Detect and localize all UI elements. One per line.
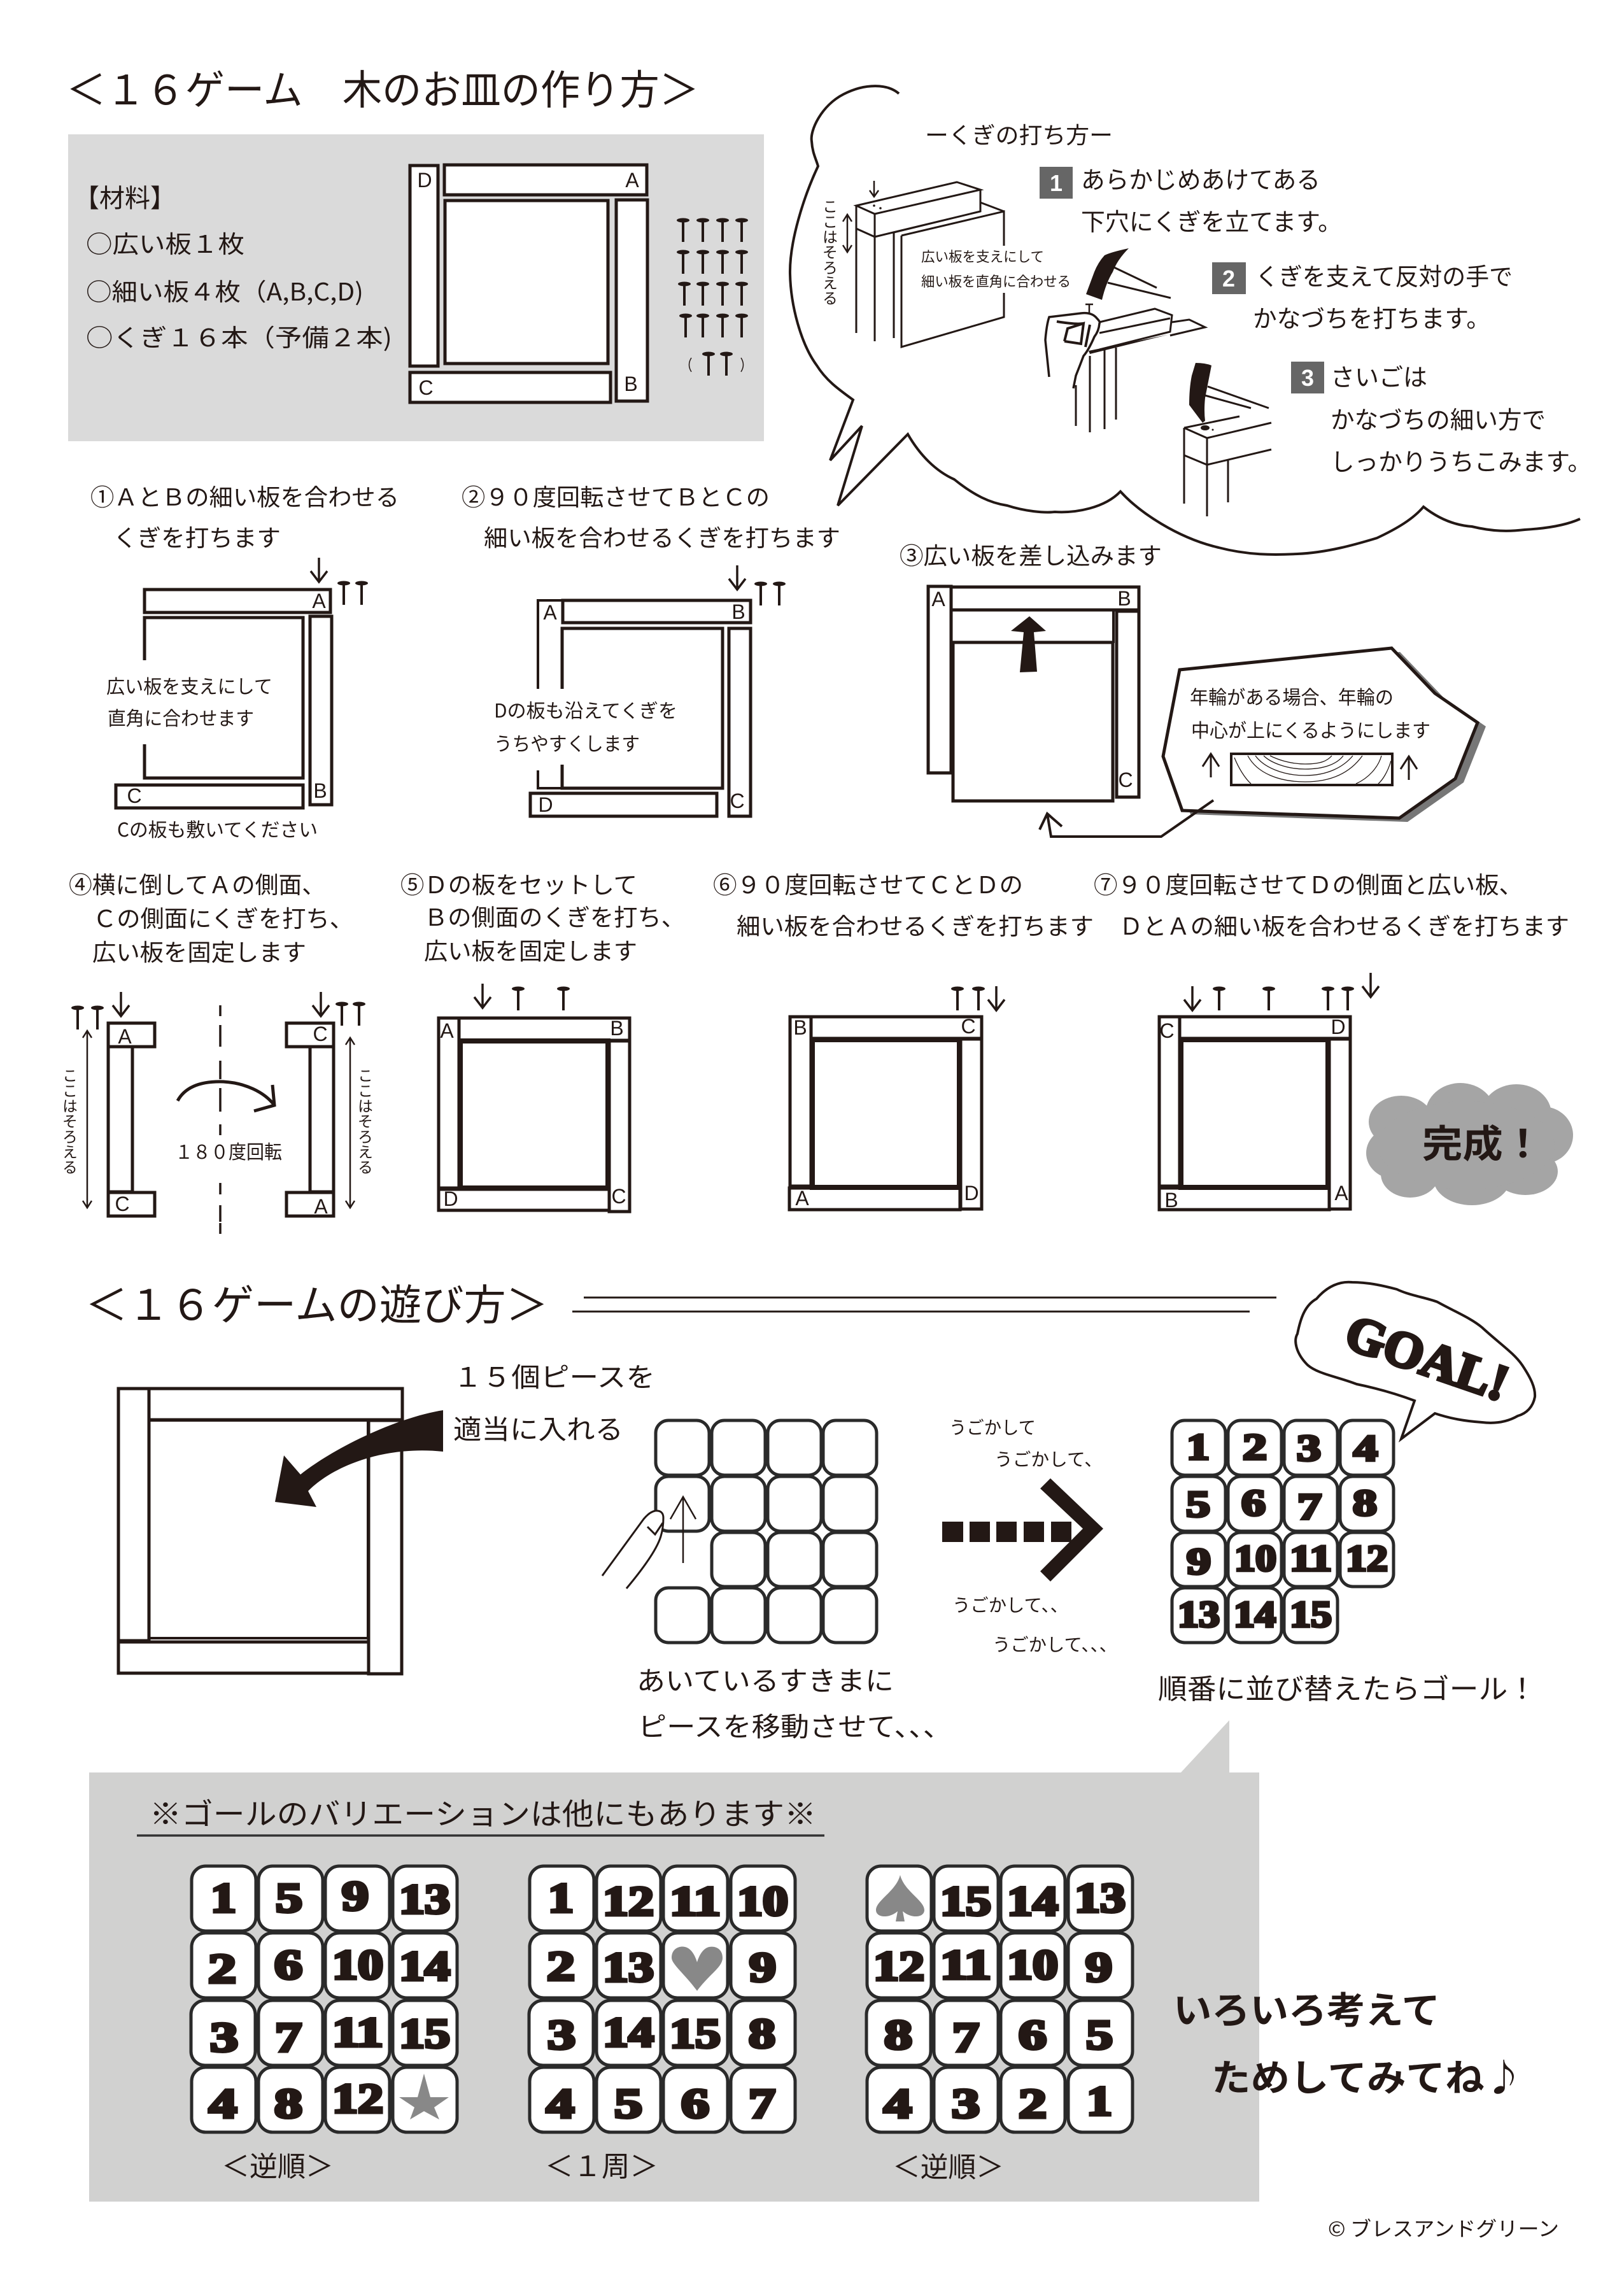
step 2: かなづちを打ちます。 bbox=[1253, 299, 1490, 334]
icon: spade bbox=[876, 1875, 924, 1921]
goal puzzle grid: 13 bbox=[1178, 1594, 1220, 1635]
completed cloud badge bbox=[1366, 1083, 1573, 1205]
panel: materials bbox=[68, 134, 764, 441]
grid: descending: 12 bbox=[873, 1943, 924, 1990]
step 1 heading: ①ＡとＢの細い板を合わせる bbox=[90, 478, 399, 513]
step 2 diagram: Dの板も沿えてくぎを bbox=[494, 695, 677, 723]
goal speech bubble: GOAL! bbox=[1338, 1305, 1516, 1412]
grid: one lap spiral: 8 bbox=[749, 2011, 775, 2057]
grid: descending: 8 bbox=[884, 2012, 912, 2058]
caption: move pieces: ピースを移動させて、、、 bbox=[638, 1706, 952, 1744]
icon: heart bbox=[672, 1947, 723, 1991]
step 5 heading: ⑤Ｄの板をセットして bbox=[400, 866, 637, 900]
grid: one lap spiral: 6 bbox=[681, 2081, 709, 2127]
grid: descending: 7 bbox=[952, 2014, 979, 2061]
grid: one lap spiral: 13 bbox=[603, 1944, 654, 1991]
materials list: 【材料】 bbox=[74, 178, 176, 215]
step 4 diagram bbox=[59, 992, 377, 1234]
grid: one lap spiral: 5 bbox=[614, 2081, 642, 2127]
step 2 heading bbox=[462, 478, 840, 553]
goal speech bubble bbox=[1296, 1282, 1535, 1439]
step 1: 1 bbox=[1050, 170, 1063, 196]
closing message: いろいろ考えて bbox=[1173, 1981, 1440, 2034]
grid: reverse order column: 13 bbox=[399, 1876, 450, 1923]
goal puzzle grid: 1 bbox=[1187, 1426, 1210, 1468]
goal puzzle grid bbox=[1172, 1420, 1394, 1643]
grid: reverse order column bbox=[191, 1866, 457, 2132]
grid: one lap spiral: 4 bbox=[546, 2081, 574, 2127]
step 5 heading: 広い板を固定します bbox=[424, 932, 637, 966]
step 7 heading bbox=[1094, 866, 1569, 942]
materials list: ○くぎ１６本（予備２本) bbox=[86, 318, 392, 353]
step 4 diagram: ここはそろえる bbox=[59, 1068, 81, 1175]
grid: descending: 4 bbox=[884, 2081, 912, 2127]
step 4 diagram: A bbox=[118, 1025, 132, 1048]
goal puzzle grid: 9 bbox=[1187, 1541, 1211, 1582]
grid: descending: 10 bbox=[1007, 1942, 1058, 1988]
step 3 diagram bbox=[928, 586, 1139, 801]
step 4 diagram: １８０度回転 bbox=[175, 1136, 282, 1164]
step 1 diagram: Cの板も敷いてください bbox=[117, 814, 318, 842]
goal puzzle grid: 11 bbox=[1290, 1538, 1332, 1579]
step 5 diagram: A bbox=[440, 1019, 454, 1042]
step 6 diagram bbox=[789, 986, 1005, 1210]
step 1 heading: くぎを打ちます bbox=[113, 519, 281, 553]
step 3 diagram: B bbox=[1117, 587, 1131, 610]
goal puzzle grid: 2 bbox=[1243, 1426, 1267, 1468]
step 1: あらかじめあけてある bbox=[1081, 160, 1320, 195]
label: one lap: ＜１周＞ bbox=[545, 2144, 658, 2184]
grid: descending: 3 bbox=[952, 2081, 980, 2127]
goal puzzle grid: 8 bbox=[1353, 1482, 1377, 1524]
grid: one lap spiral: 3 bbox=[547, 2012, 575, 2058]
grid: descending: 9 bbox=[1085, 1944, 1112, 1991]
step 4 diagram: ここはそろえる bbox=[354, 1068, 377, 1175]
dashed arrow with captions: うごかして bbox=[949, 1414, 1036, 1440]
goal puzzle grid: 5 bbox=[1186, 1483, 1210, 1525]
panel heading: ※ゴールのバリエーションは他にもあります※ bbox=[150, 1790, 816, 1834]
completed cloud badge: 完成！ bbox=[1422, 1114, 1543, 1169]
step 3: しっかりうちこみます。 bbox=[1331, 442, 1592, 478]
dashed arrow with captions: うごかして、、、 bbox=[992, 1631, 1117, 1657]
step 5 diagram: D bbox=[443, 1187, 458, 1210]
step 2 bbox=[1212, 257, 1513, 334]
grid: reverse order column: 2 bbox=[208, 1946, 236, 1992]
grid: one lap spiral: 15 bbox=[670, 2011, 721, 2057]
callout: grain direction: 年輪がある場合、年輪の bbox=[1190, 682, 1394, 710]
caption: insert 15 pieces: １５個ピースを bbox=[453, 1356, 655, 1395]
caption: move pieces: あいているすきまに bbox=[637, 1660, 894, 1699]
grid: descending: 14 bbox=[1007, 1878, 1058, 1925]
step 2 diagram bbox=[494, 565, 786, 816]
grid: one lap spiral: 7 bbox=[749, 2081, 775, 2127]
label: reverse 2: ＜逆順＞ bbox=[893, 2144, 1004, 2185]
step 4 diagram: C bbox=[115, 1192, 130, 1215]
label: reverse: ＜逆順＞ bbox=[222, 2144, 334, 2184]
grid: reverse order column: 4 bbox=[209, 2081, 237, 2127]
grid: reverse order column: 3 bbox=[210, 2014, 238, 2061]
step 3 diagram: A bbox=[931, 588, 945, 611]
title: how to make the wooden tray: ＜１６ゲーム 木のお皿の作り方＞ bbox=[66, 58, 699, 117]
parts diagram bbox=[410, 165, 647, 402]
grid: reverse order column: 9 bbox=[342, 1873, 369, 1920]
step 6 diagram: B bbox=[793, 1016, 807, 1039]
step 3: 3 bbox=[1301, 365, 1314, 391]
goal puzzle grid: 10 bbox=[1234, 1538, 1276, 1579]
grid: reverse order column: 11 bbox=[332, 2009, 383, 2056]
grid: descending: 6 bbox=[1019, 2012, 1047, 2058]
materials list: ○細い板４枚（A,B,C,D) bbox=[86, 272, 364, 308]
title: how to play: ＜１６ゲームの遊び方＞ bbox=[85, 1271, 548, 1333]
step 2 heading: ②９０度回転させてＢとＣの bbox=[462, 478, 770, 513]
step 4 heading bbox=[69, 866, 353, 968]
caption: insert 15 pieces bbox=[453, 1356, 655, 1447]
parts diagram: C bbox=[418, 376, 434, 399]
step 3 diagram: C bbox=[1118, 768, 1133, 791]
step 3 bbox=[1291, 358, 1592, 478]
callout: how to hammer a nail bbox=[790, 86, 1592, 555]
materials list: ○広い板１枚 bbox=[86, 225, 244, 260]
step 4 heading: 広い板を固定します bbox=[92, 933, 306, 968]
step 1 bbox=[1040, 160, 1342, 237]
grid: one lap spiral: 2 bbox=[547, 1943, 575, 1990]
step 1 diagram: C bbox=[127, 784, 142, 807]
grid: one lap spiral: 9 bbox=[749, 1944, 776, 1991]
step 3: さいごは bbox=[1331, 358, 1427, 393]
grid: reverse order column: 8 bbox=[274, 2081, 302, 2127]
illustration: hammer finishing the nail bbox=[1184, 363, 1271, 516]
step 1 diagram: A bbox=[312, 590, 326, 612]
dashed arrow with captions: うごかして、、 bbox=[952, 1592, 1068, 1617]
grid: reverse order column: 1 bbox=[211, 1875, 236, 1921]
step 6 heading: 細い板を合わせるくぎを打ちます bbox=[737, 907, 1094, 942]
finger and arrow bbox=[602, 1497, 696, 1604]
step 6 heading bbox=[713, 866, 1094, 942]
dashed arrow with captions bbox=[942, 1414, 1117, 1657]
step 1 heading bbox=[90, 478, 399, 553]
closing message bbox=[1173, 1981, 1523, 2102]
step 2: くぎを支えて反対の手で bbox=[1255, 257, 1513, 292]
goal puzzle grid: 3 bbox=[1297, 1427, 1321, 1469]
step 1 diagram: 直角に合わせます bbox=[108, 703, 254, 731]
materials list bbox=[74, 178, 392, 353]
callout: grain direction bbox=[1040, 648, 1486, 837]
parts diagram: A bbox=[625, 169, 639, 192]
illustration: beam with pilot holes: ここはそろえる bbox=[819, 199, 842, 306]
grid: reverse order column: 15 bbox=[399, 2011, 450, 2057]
goal puzzle grid: 12 bbox=[1346, 1538, 1388, 1579]
step 6 diagram: C bbox=[961, 1015, 976, 1038]
step 4 diagram: C bbox=[313, 1022, 328, 1045]
parts diagram: D bbox=[417, 169, 432, 192]
grid: one lap spiral: 12 bbox=[603, 1878, 654, 1925]
caption: goal in order: 順番に並び替えたらゴール！ bbox=[1158, 1666, 1537, 1707]
step 5 diagram: C bbox=[611, 1185, 626, 1208]
copyright: © ブレスアンドグリーン bbox=[1328, 2213, 1559, 2242]
step 5 heading: Ｂの側面のくぎを打ち、 bbox=[424, 898, 685, 933]
step 2 diagram: C bbox=[730, 789, 745, 812]
grid: one lap spiral: 14 bbox=[603, 2009, 654, 2056]
step 2 diagram: B bbox=[731, 600, 745, 623]
panel: goal variations bbox=[89, 1720, 1259, 2202]
step 1 diagram bbox=[106, 558, 368, 842]
grid: reverse order column: 6 bbox=[274, 1942, 302, 1988]
step 2 diagram: D bbox=[538, 793, 553, 816]
step 2: 2 bbox=[1222, 265, 1235, 292]
step 7 diagram: A bbox=[1334, 1182, 1348, 1205]
illustration: beam with pilot holes: 細い板を直角に合わせる bbox=[921, 271, 1071, 291]
step 7 diagram: B bbox=[1164, 1189, 1178, 1212]
grid: reverse order column: 5 bbox=[276, 1875, 302, 1921]
step 2 diagram: A bbox=[543, 601, 557, 624]
grid: one lap spiral: 10 bbox=[737, 1878, 788, 1925]
callout heading: ーくぎの打ち方ー bbox=[925, 117, 1113, 150]
grid: one lap spiral bbox=[529, 1866, 795, 2132]
step 4 heading: ④横に倒してＡの側面、 bbox=[69, 866, 325, 900]
closing message: ためしてみてね♪ bbox=[1211, 2048, 1523, 2102]
arrow into tray bbox=[275, 1410, 443, 1507]
step 5 diagram: B bbox=[610, 1017, 624, 1040]
step 7 heading: ⑦９０度回転させてＤの側面と広い板、 bbox=[1094, 866, 1523, 900]
dashed arrow with captions: うごかして、 bbox=[994, 1446, 1103, 1471]
step 4 heading: Ｃの側面にくぎを打ち、 bbox=[93, 900, 353, 934]
nails bbox=[677, 218, 748, 376]
step 4 diagram: A bbox=[314, 1195, 328, 1218]
step 6 heading: ⑥９０度回転させてＣとＤの bbox=[713, 866, 1023, 900]
goal puzzle grid: 7 bbox=[1297, 1486, 1322, 1527]
step 3: かなづちの細い方で bbox=[1331, 400, 1546, 435]
grid: reverse order column: 12 bbox=[332, 2076, 383, 2122]
step 1 diagram: 広い板を支えにして bbox=[106, 671, 272, 699]
step 6 diagram: A bbox=[795, 1187, 809, 1210]
grid: reverse order column: 10 bbox=[332, 1942, 383, 1988]
icon: star bbox=[399, 2074, 449, 2119]
grid: descending: 11 bbox=[940, 1942, 991, 1988]
step 3 heading: ③広い板を差し込みます bbox=[900, 537, 1162, 571]
empty puzzle grid bbox=[602, 1420, 877, 1643]
step 1: 下穴にくぎを立てます。 bbox=[1081, 202, 1342, 237]
step 2 heading: 細い板を合わせるくぎを打ちます bbox=[484, 519, 840, 553]
wood grain bbox=[1231, 754, 1392, 785]
grid: reverse order column: 14 bbox=[399, 1943, 450, 1990]
step 5 diagram bbox=[439, 984, 630, 1212]
grid: descending: 2 bbox=[1019, 2081, 1047, 2127]
step 1 diagram: B bbox=[313, 779, 327, 802]
step 6 diagram: D bbox=[964, 1182, 979, 1205]
step 7 diagram bbox=[1159, 973, 1379, 1212]
step 2 diagram: うちやすくします bbox=[494, 728, 640, 756]
caption: move pieces bbox=[637, 1660, 952, 1744]
grid: descending: 1 bbox=[1087, 2078, 1112, 2125]
goal puzzle grid: 4 bbox=[1353, 1427, 1378, 1469]
tray diagram with arrow bbox=[118, 1389, 443, 1674]
grid: one lap spiral: 1 bbox=[548, 1875, 574, 1921]
grid: one lap spiral: 11 bbox=[670, 1878, 721, 1925]
illustration: beam with pilot holes: 広い板を支えにして bbox=[921, 246, 1044, 266]
illustration: beam with pilot holes bbox=[819, 181, 1071, 347]
step 5 heading bbox=[400, 866, 685, 966]
grid: reverse order column: 7 bbox=[275, 2014, 302, 2061]
step 7 heading: ＤとＡの細い板を合わせるくぎを打ちます bbox=[1119, 907, 1569, 942]
callout: grain direction: 中心が上にくるようにします bbox=[1191, 715, 1430, 743]
illustration: hammer and hand bbox=[1045, 248, 1205, 432]
goal puzzle grid: 14 bbox=[1234, 1594, 1276, 1635]
step 7 diagram: C bbox=[1159, 1019, 1175, 1042]
caption: insert 15 pieces: 適当に入れる bbox=[453, 1408, 623, 1447]
step 7 diagram: D bbox=[1331, 1015, 1346, 1038]
goal puzzle grid: 6 bbox=[1241, 1482, 1266, 1524]
grid: descending bbox=[866, 1866, 1133, 2132]
parts diagram: B bbox=[624, 372, 638, 395]
grid: descending: 5 bbox=[1086, 2012, 1113, 2058]
grid: descending: 13 bbox=[1075, 1875, 1126, 1921]
grid: descending: 15 bbox=[940, 1878, 991, 1925]
goal puzzle grid: 15 bbox=[1290, 1594, 1332, 1635]
